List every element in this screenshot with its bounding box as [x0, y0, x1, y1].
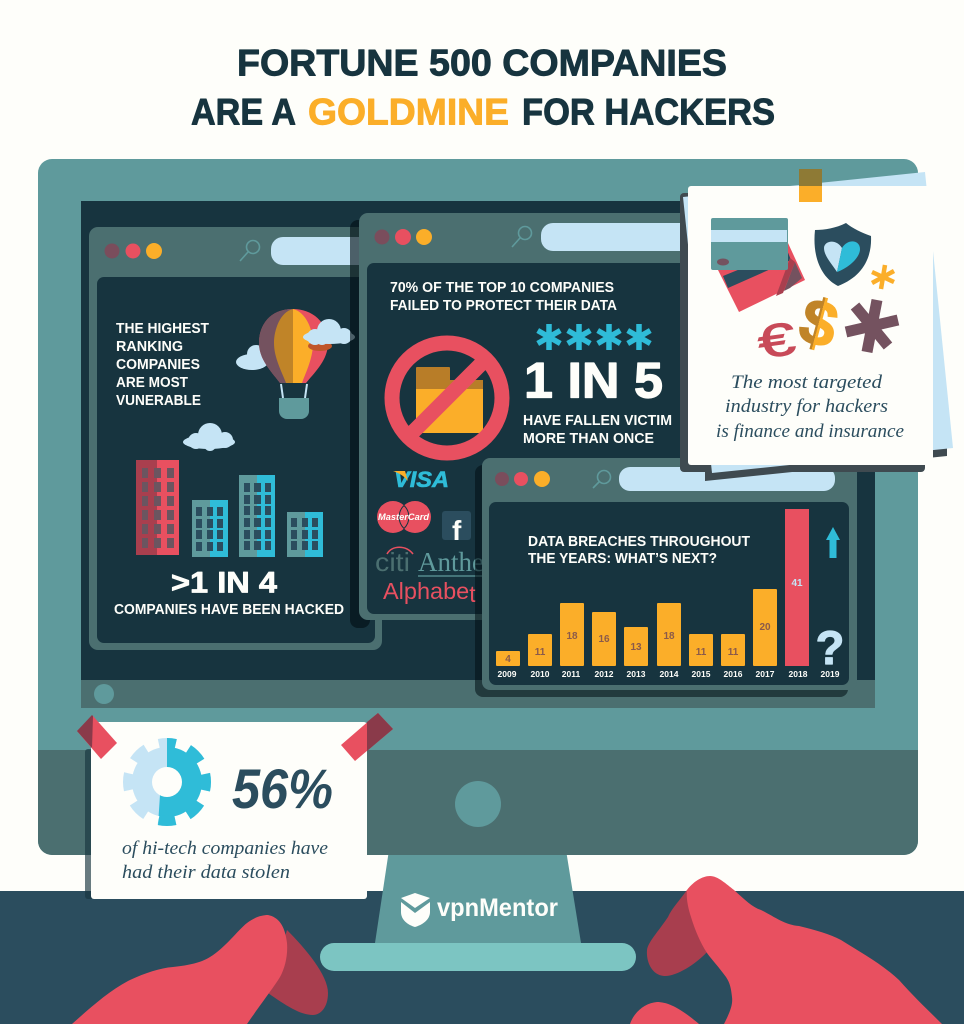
tape: orange	[799, 169, 822, 202]
icon: cloud above buildings	[183, 423, 235, 451]
text: fallen victim	[524, 415, 672, 443]
bar chart: 20	[759, 622, 771, 633]
bar chart: 2009	[498, 669, 517, 679]
icon: back cloud	[236, 345, 268, 370]
tape: left	[77, 715, 117, 759]
icon: large asterisk	[846, 300, 898, 352]
stat: 56 percent: 56%	[232, 757, 333, 820]
tape: right	[341, 713, 393, 761]
bar chart: 11	[535, 647, 546, 658]
bar chart: 11	[728, 647, 739, 658]
logo: MasterCard	[377, 501, 431, 533]
logo: Facebook	[442, 511, 471, 540]
stat: more than 1 in 4: >1 IN 4	[171, 566, 277, 600]
logo: Facebook: f	[452, 515, 462, 546]
icon: password asterisks	[538, 324, 650, 350]
text: 70 percent: 70% OF THE TOP 10 COMPANIES	[390, 280, 614, 296]
icon: gear	[128, 743, 206, 821]
logo: Citi	[376, 546, 414, 572]
bar chart: 18	[663, 631, 675, 642]
icon: forbidden folder	[392, 343, 502, 453]
title: FOR HACKERS	[522, 92, 775, 132]
title	[191, 42, 775, 132]
bar chart: 13	[630, 642, 642, 653]
logo: Alphabet: t	[469, 581, 476, 607]
text: companies hacked: COMPANIES HAVE BEEN HACKED	[114, 602, 344, 618]
logo: Alphabet: Alphabe	[383, 578, 469, 604]
bar chart: 2013	[627, 669, 646, 679]
text: highest ranking	[116, 321, 209, 409]
text: highest ranking: THE HIGHEST	[116, 321, 209, 337]
bar chart: 2016	[724, 669, 743, 679]
bar chart: 2011	[562, 669, 580, 679]
icon: blue building 3	[239, 475, 275, 557]
note: hi-tech companies	[77, 713, 393, 899]
icon: shield with heart	[814, 223, 871, 286]
bar chart: 2015	[692, 669, 711, 679]
desk	[0, 891, 964, 1024]
text: finance note: industry for hackers	[725, 396, 888, 417]
bar chart: 16	[598, 634, 610, 645]
logo: vpnMentor	[401, 893, 558, 927]
monitor screen	[81, 201, 875, 708]
text: highest ranking: COMPANIES	[116, 357, 200, 373]
logo: Visa: VISA	[394, 467, 449, 492]
bar chart: 4	[505, 654, 511, 665]
window shadow	[350, 220, 370, 628]
chart title: THE YEARS: WHAT’S NEXT?	[528, 551, 717, 567]
title: GOLDMINE	[308, 92, 509, 132]
text: highest ranking: VUNERABLE	[116, 393, 201, 409]
bar chart: 2018	[789, 669, 808, 679]
logo: Anthem	[418, 552, 482, 577]
icon: blue building 2	[192, 500, 228, 557]
bar chart: 2010	[531, 669, 550, 679]
icon: dollar sign: $	[792, 284, 845, 362]
monitor body	[38, 159, 918, 855]
text: fallen victim: HAVE FALLEN VICTIM	[523, 413, 672, 429]
bar chart: 11	[696, 647, 707, 658]
bar chart: 2019	[821, 669, 840, 679]
text: finance note: is finance and insurance	[716, 421, 904, 442]
bar chart: 41	[791, 578, 803, 589]
icon: red tower	[136, 460, 179, 555]
text: hi-tech note	[122, 838, 328, 883]
panel: browser window top 10 companies	[359, 213, 711, 620]
bar chart: 2017	[756, 669, 775, 679]
bar chart: 2012	[595, 669, 614, 679]
window shadow	[475, 465, 848, 697]
monitor base	[320, 943, 636, 971]
icon: question mark: ?	[816, 621, 844, 674]
logo: Citi: citi	[375, 547, 410, 577]
bar chart: 18	[566, 631, 578, 642]
icon: credit cards	[711, 218, 805, 312]
logo: Visa	[393, 471, 448, 488]
note: finance and insurance	[680, 169, 953, 481]
icon: blue building 4	[287, 512, 323, 557]
bar chart	[496, 509, 840, 679]
icon: up arrow	[826, 527, 840, 558]
chart title: DATA BREACHES THROUGHOUT	[528, 534, 750, 550]
logo: Anthem: Anthem	[418, 547, 505, 577]
left hand	[72, 915, 328, 1024]
panel: browser window data breaches	[482, 458, 857, 690]
text: highest ranking: ARE MOST	[116, 375, 188, 391]
panel: browser window highest ranking companies	[89, 227, 382, 650]
bar chart: 2014	[660, 669, 679, 679]
text: finance note: The most targeted	[731, 372, 883, 393]
icon: small asterisk	[872, 265, 894, 289]
monitor stand	[375, 850, 581, 943]
logo: MasterCard: MasterCard	[378, 512, 429, 523]
text: hi-tech note: had their data stolen	[122, 862, 290, 883]
text: finance note	[716, 372, 904, 442]
text: highest ranking: RANKING	[116, 339, 183, 355]
chart title	[528, 534, 750, 567]
text: 70 percent	[390, 282, 617, 310]
title: FORTUNE 500 COMPANIES	[237, 42, 727, 84]
icon: hot air balloon	[259, 309, 328, 419]
title: ARE A	[191, 92, 296, 132]
icon: front cloud	[303, 319, 355, 351]
right hand	[630, 876, 942, 1024]
text: 70 percent: FAILED TO PROTECT THEIR DATA	[390, 298, 617, 314]
text: hi-tech note: of hi-tech companies have	[122, 838, 328, 859]
logo: vpnMentor: vpnMentor	[437, 894, 558, 922]
stat: 1 in 5: 1 IN 5	[524, 352, 663, 408]
text: fallen victim: MORE THAN ONCE	[523, 431, 654, 447]
icon: euro sign: €	[755, 312, 798, 368]
